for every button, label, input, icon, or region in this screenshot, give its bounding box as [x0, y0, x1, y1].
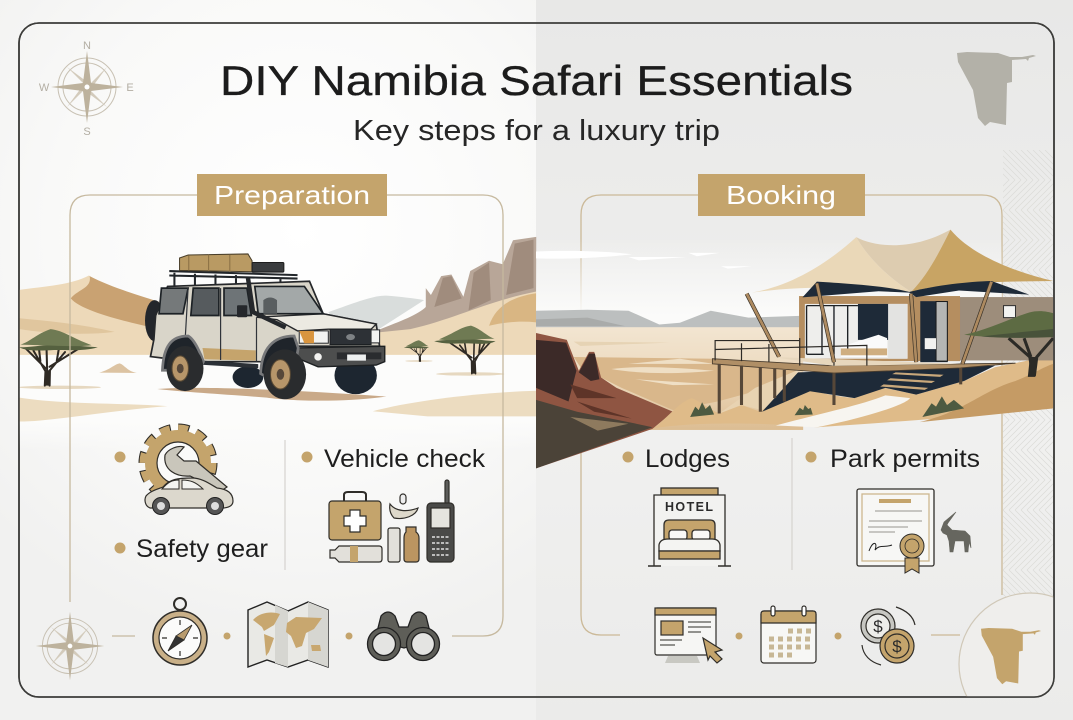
heading tab: Booking: Booking	[726, 180, 836, 210]
label: vehicle check: Vehicle check	[324, 445, 486, 473]
chevron pattern strip	[1003, 150, 1053, 600]
acacia by lodge	[964, 311, 1053, 377]
scene: lodge overlooking desert	[536, 230, 1053, 468]
icon: oryx	[941, 512, 971, 552]
circular map badge	[958, 592, 1054, 696]
heading tab: Booking	[698, 174, 865, 216]
icon: gear, wrench and car	[145, 431, 233, 514]
agave plants	[690, 396, 964, 417]
tan lower trim	[202, 348, 256, 361]
icon: folded map	[248, 602, 328, 667]
lodge frame	[799, 296, 960, 361]
windows	[159, 288, 188, 314]
icon: currency exchange	[861, 607, 915, 665]
compass rose top left: S	[83, 126, 91, 138]
dot	[346, 632, 352, 640]
dot	[224, 632, 230, 640]
background: left half	[0, 0, 536, 720]
dot	[834, 632, 842, 640]
grille	[330, 329, 371, 345]
front wheel	[264, 349, 306, 399]
bullet beside gear icon	[114, 452, 126, 462]
rear wheel	[167, 346, 203, 391]
foreground dune	[654, 355, 1053, 428]
mesa	[536, 333, 673, 468]
body	[150, 281, 380, 367]
icon: hotel with bed	[648, 488, 731, 566]
compass rose top left: W	[39, 82, 50, 94]
dark roof underside	[802, 281, 1029, 297]
far wheels	[233, 366, 263, 388]
deck posts	[719, 364, 961, 414]
rear fender	[162, 336, 203, 370]
headlight	[299, 331, 328, 343]
sill	[202, 361, 258, 368]
shadow	[157, 388, 386, 401]
icon: binoculars	[368, 612, 440, 660]
icon: currency exchange: $	[873, 617, 883, 636]
subtitle: Key steps for a luxury trip	[353, 115, 720, 147]
hood	[256, 314, 376, 331]
front fender	[261, 336, 301, 377]
room interior	[805, 304, 908, 359]
acacia trees	[19, 329, 98, 386]
panel: booking border	[581, 195, 1002, 635]
snorkel	[248, 278, 286, 327]
title: DIY Namibia Safari Essentials	[220, 57, 853, 104]
tent roof	[752, 230, 1053, 293]
panel: preparation border	[70, 195, 503, 636]
mirror	[237, 305, 247, 317]
distant hill	[328, 296, 424, 331]
under deck shadow	[762, 366, 995, 412]
divider preparation	[284, 440, 286, 570]
spare tire	[145, 300, 164, 341]
heading tab: Preparation: Preparation	[214, 180, 370, 210]
deck railing	[715, 338, 867, 366]
heading tab: Preparation	[197, 174, 387, 216]
bumper	[296, 346, 385, 367]
sand patches	[19, 398, 168, 422]
icon: calendar	[761, 606, 816, 663]
icon: compass rose bottom left	[36, 612, 104, 680]
scene: desert with vehicle	[19, 237, 536, 450]
tent poles front	[817, 282, 992, 364]
divider booking	[791, 438, 793, 570]
door lines	[185, 288, 256, 362]
compass rose top left: E	[126, 82, 134, 94]
icon: hotel with bed: HOTEL	[665, 500, 713, 514]
door	[920, 301, 948, 362]
desert plain	[536, 327, 803, 430]
icon: booking website	[655, 608, 722, 663]
label: safety gear: Safety gear	[136, 535, 268, 563]
label: lodges: Lodges	[645, 445, 730, 473]
sand dunes	[19, 275, 161, 355]
compass rose top left	[39, 40, 134, 138]
ground	[19, 350, 536, 450]
dot	[736, 632, 742, 640]
icon: pocket compass	[153, 598, 207, 665]
sky	[536, 244, 1002, 324]
background: right half	[536, 0, 1073, 720]
icon: currency exchange: $	[892, 637, 902, 656]
vehicle: safari 4x4	[145, 254, 386, 401]
Namibia map top right	[957, 52, 1036, 126]
tent poles back	[747, 294, 779, 357]
Namibia map bottom right	[981, 628, 1041, 684]
rock formation	[376, 237, 536, 334]
icon: safety kit and radio	[329, 480, 454, 562]
stairs	[880, 372, 944, 390]
deck	[712, 359, 1016, 373]
distant mountains	[536, 310, 800, 328]
label: park permits: Park permits	[830, 445, 980, 473]
icon: permit certificate	[857, 489, 934, 573]
roof rack and luggage	[169, 271, 298, 286]
compass rose top left: N	[83, 40, 91, 52]
right wall	[959, 297, 1053, 360]
